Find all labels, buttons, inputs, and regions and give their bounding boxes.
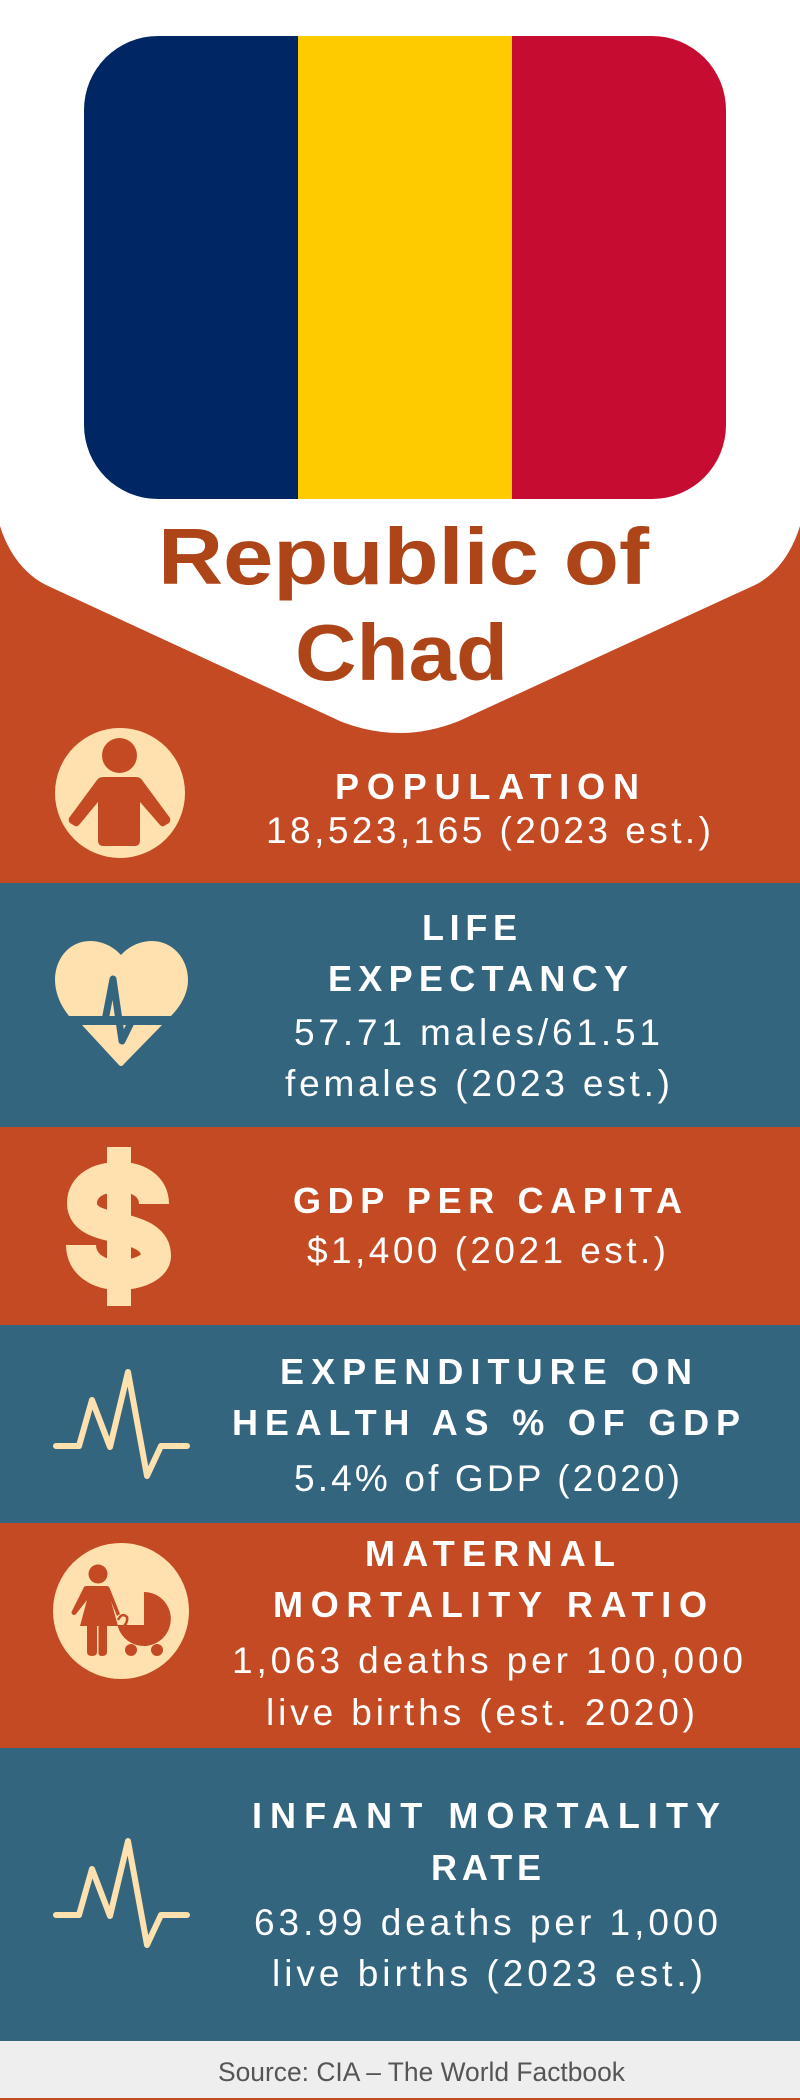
- population text: POPULATION: [335, 766, 639, 807]
- maternal mortality text: live births (est. 2020): [266, 1692, 695, 1733]
- life expectancy text: LIFE: [422, 907, 517, 948]
- icon: heart with pulse: [55, 941, 188, 1066]
- panel: maternal mortality: [0, 1523, 800, 1748]
- panel: life expectancy: [0, 883, 800, 1127]
- maternal mortality text: [232, 1533, 743, 1733]
- infant mortality text: 63.99 deaths per 1,000: [254, 1902, 718, 1943]
- gdp text: GDP PER CAPITA: [293, 1180, 682, 1221]
- panel: population: [55, 728, 711, 858]
- health expenditure text: HEALTH AS % OF GDP: [232, 1402, 740, 1443]
- panel: source footer: [0, 2041, 800, 2100]
- gdp text: [293, 1180, 682, 1271]
- icon: pulse line: [56, 1841, 187, 1945]
- maternal mortality text: 1,063 deaths per 100,000: [232, 1640, 743, 1681]
- panel: infant mortality: [0, 1748, 800, 2041]
- health expenditure text: [232, 1351, 740, 1499]
- life expectancy text: EXPECTANCY: [328, 958, 628, 999]
- icon: pulse line: [56, 1372, 187, 1476]
- population text: 18,523,165 (2023 est.): [266, 810, 711, 851]
- infant mortality text: live births (2023 est.): [272, 1953, 703, 1994]
- panel: header orange band: [0, 526, 800, 883]
- health expenditure text: 5.4% of GDP (2020): [294, 1458, 680, 1499]
- panel: health expenditure: [0, 1325, 800, 1523]
- life expectancy text: 57.71 males/61.51: [294, 1012, 660, 1053]
- icon: dollar sign: [81, 1147, 156, 1306]
- title: Republic of: [158, 512, 649, 601]
- life expectancy text: females (2023 est.): [285, 1063, 670, 1104]
- icon: mother with stroller: [53, 1543, 189, 1679]
- maternal mortality text: MATERNAL: [365, 1533, 615, 1574]
- infant mortality text: INFANT MORTALITY: [252, 1795, 720, 1836]
- gdp text: $1,400 (2021 est.): [307, 1230, 666, 1271]
- population text: [266, 766, 711, 851]
- title: Chad: [295, 608, 508, 697]
- source text: Source: CIA – The World Factbook: [218, 2057, 625, 2087]
- life expectancy text: [285, 907, 670, 1104]
- icon: person: [55, 728, 185, 858]
- infant mortality text: [252, 1795, 720, 1994]
- infant mortality text: RATE: [431, 1847, 541, 1888]
- flag of Chad: [84, 36, 726, 499]
- maternal mortality text: MORTALITY RATIO: [273, 1584, 707, 1625]
- panel: gdp per capita: [0, 1127, 800, 1325]
- health expenditure text: EXPENDITURE ON: [280, 1351, 692, 1392]
- title: [158, 512, 649, 697]
